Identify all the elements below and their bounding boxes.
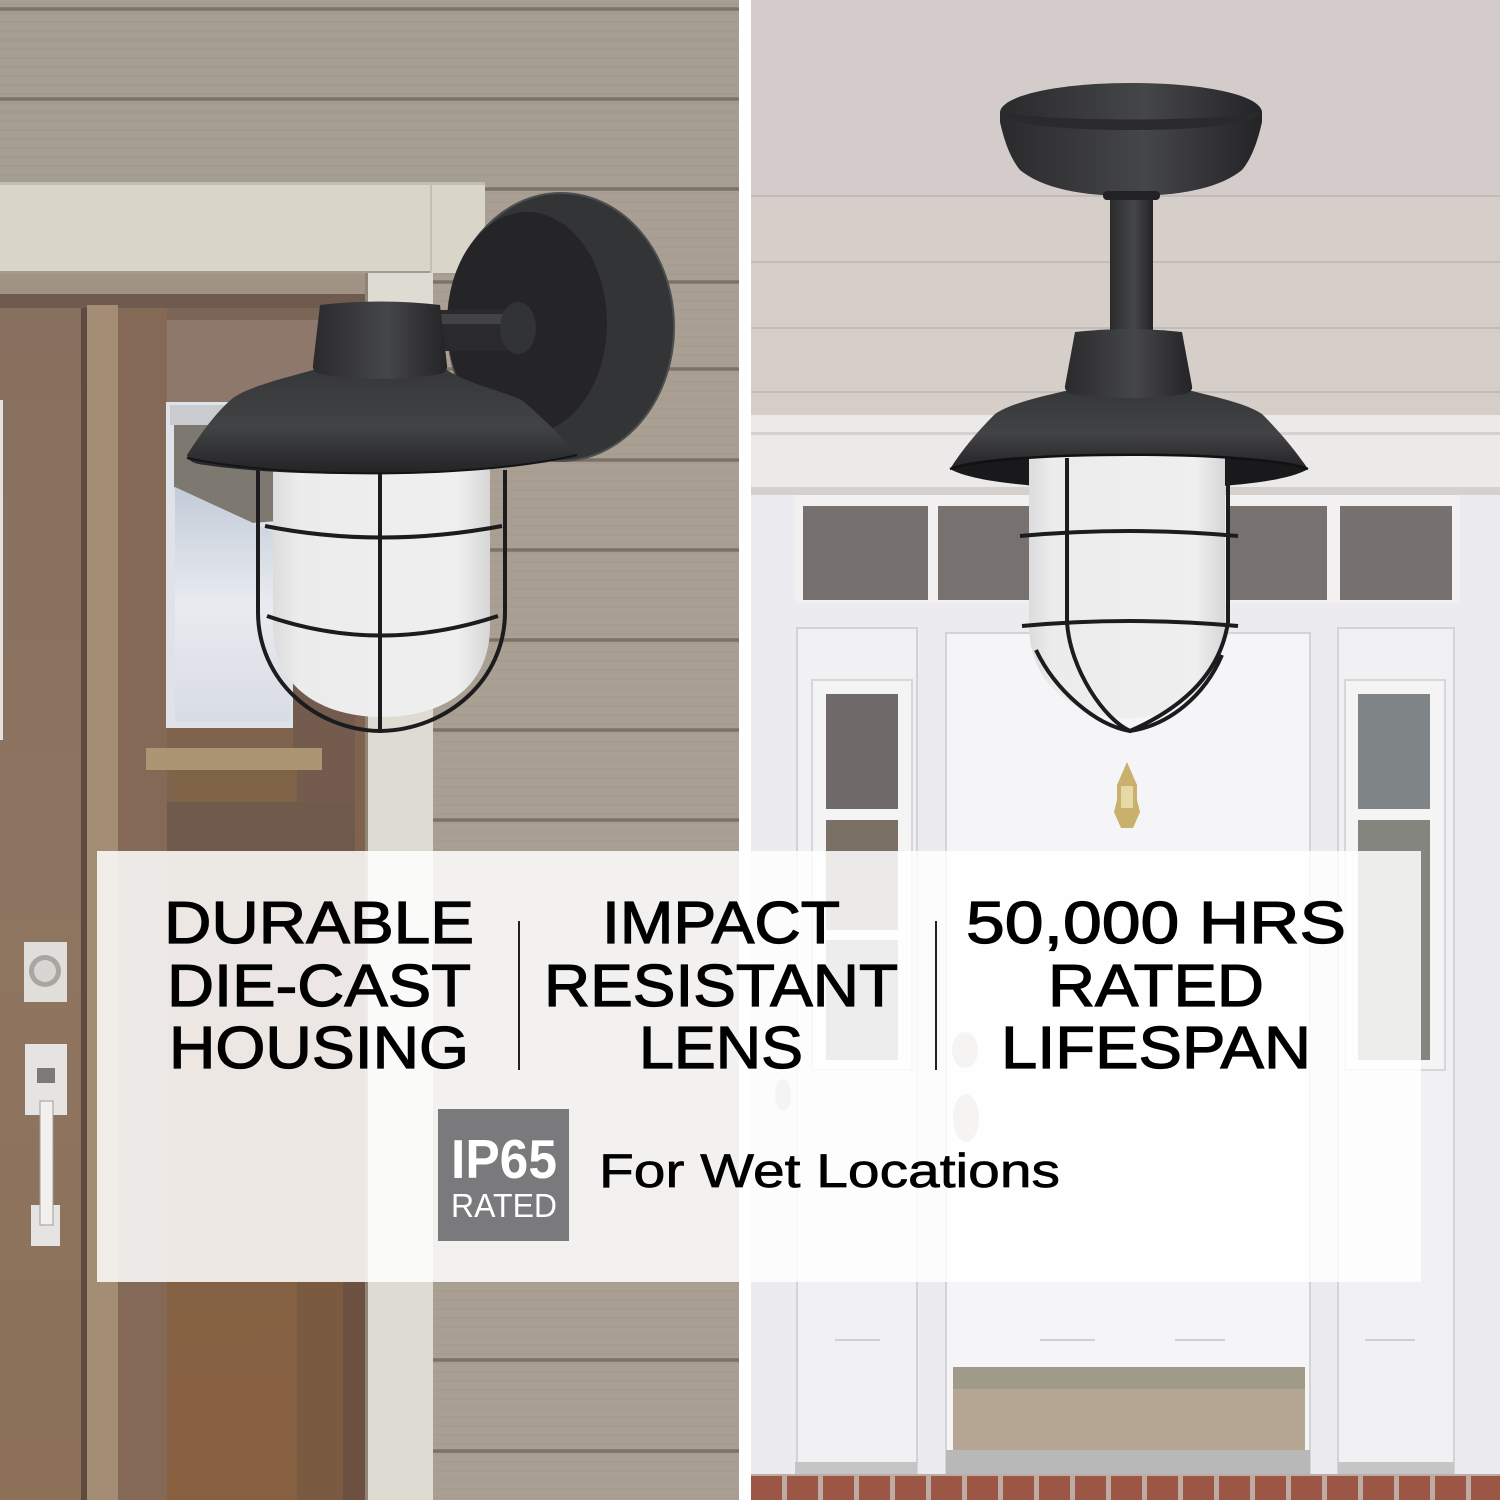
arm xyxy=(440,310,520,351)
text: impact lens: RESISTANT xyxy=(544,953,898,1019)
backplate xyxy=(448,193,674,461)
hood underside xyxy=(950,455,1308,490)
text: lifespan: LIFESPAN xyxy=(1001,1015,1311,1081)
icon: door deadbolt xyxy=(24,942,67,1002)
canopy xyxy=(1000,83,1262,196)
hood xyxy=(950,391,1308,469)
hood cap xyxy=(313,302,447,379)
text: durable housing: HOUSING xyxy=(169,1015,469,1081)
transom windows xyxy=(795,495,1460,603)
text: lifespan: 50,000 HRS xyxy=(966,890,1346,956)
hood xyxy=(187,370,577,474)
stem xyxy=(1110,196,1153,332)
wooden door xyxy=(0,274,365,1500)
panel: ceiling light on porch xyxy=(751,0,1500,1500)
front door xyxy=(775,628,1454,1500)
brick step xyxy=(751,1474,1500,1500)
icon: door handle xyxy=(25,1044,67,1246)
text: impact lens xyxy=(544,890,898,1081)
hood cap xyxy=(1065,329,1192,398)
icon: IP65 rated badge: IP65 xyxy=(451,1128,557,1190)
glass xyxy=(1029,450,1225,718)
text: impact lens: LENS xyxy=(639,1015,803,1081)
glass xyxy=(273,465,490,717)
icon: brass door knocker xyxy=(1114,762,1140,828)
porch molding xyxy=(751,415,1500,495)
text: durable housing: DURABLE xyxy=(164,890,474,956)
text: lifespan xyxy=(966,890,1346,1081)
icon: IP65 rated badge xyxy=(438,1109,569,1241)
text: durable housing xyxy=(164,890,474,1081)
icon: ceiling lamp xyxy=(950,83,1308,731)
panel: translucent feature band xyxy=(97,851,1421,1282)
text: durable housing: DIE-CAST xyxy=(167,953,471,1019)
door window xyxy=(166,402,293,728)
text: impact lens: IMPACT xyxy=(602,890,840,956)
icon: IP65 rated badge: RATED xyxy=(451,1187,557,1224)
text: lifespan: RATED xyxy=(1048,953,1264,1019)
cage xyxy=(1020,458,1238,731)
icon: wall sconce lamp xyxy=(187,193,674,731)
text: for wet locations: For Wet Locations xyxy=(599,1144,1060,1197)
panel: wall sconce on siding xyxy=(0,0,739,1500)
door trim xyxy=(0,182,485,1500)
cage xyxy=(258,470,505,731)
